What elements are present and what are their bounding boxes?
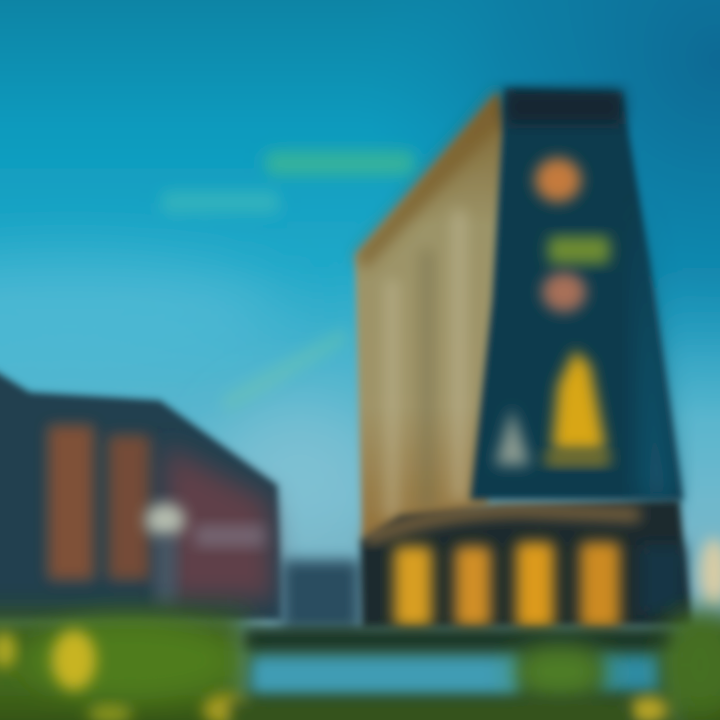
sign: yellow figure <box>552 350 606 450</box>
sign: pink <box>542 272 586 312</box>
tower: light left face <box>355 92 505 540</box>
foreground foliage <box>0 615 720 720</box>
street lamp glow <box>145 503 185 537</box>
sign: green <box>548 236 610 264</box>
right edge glow <box>700 538 720 606</box>
ground and water <box>0 612 720 720</box>
tower base <box>360 500 692 630</box>
left building <box>0 355 282 620</box>
tower: window stripes <box>385 210 466 520</box>
sign: pale figure <box>495 408 530 465</box>
faint green streaks in sky <box>160 150 415 405</box>
base columns <box>394 542 620 630</box>
tower: roof edge <box>355 88 505 270</box>
sign: orange <box>535 158 581 202</box>
water <box>250 655 520 695</box>
tower: dark right face <box>470 88 684 500</box>
distant skyline <box>282 560 360 630</box>
main tower <box>355 88 684 540</box>
